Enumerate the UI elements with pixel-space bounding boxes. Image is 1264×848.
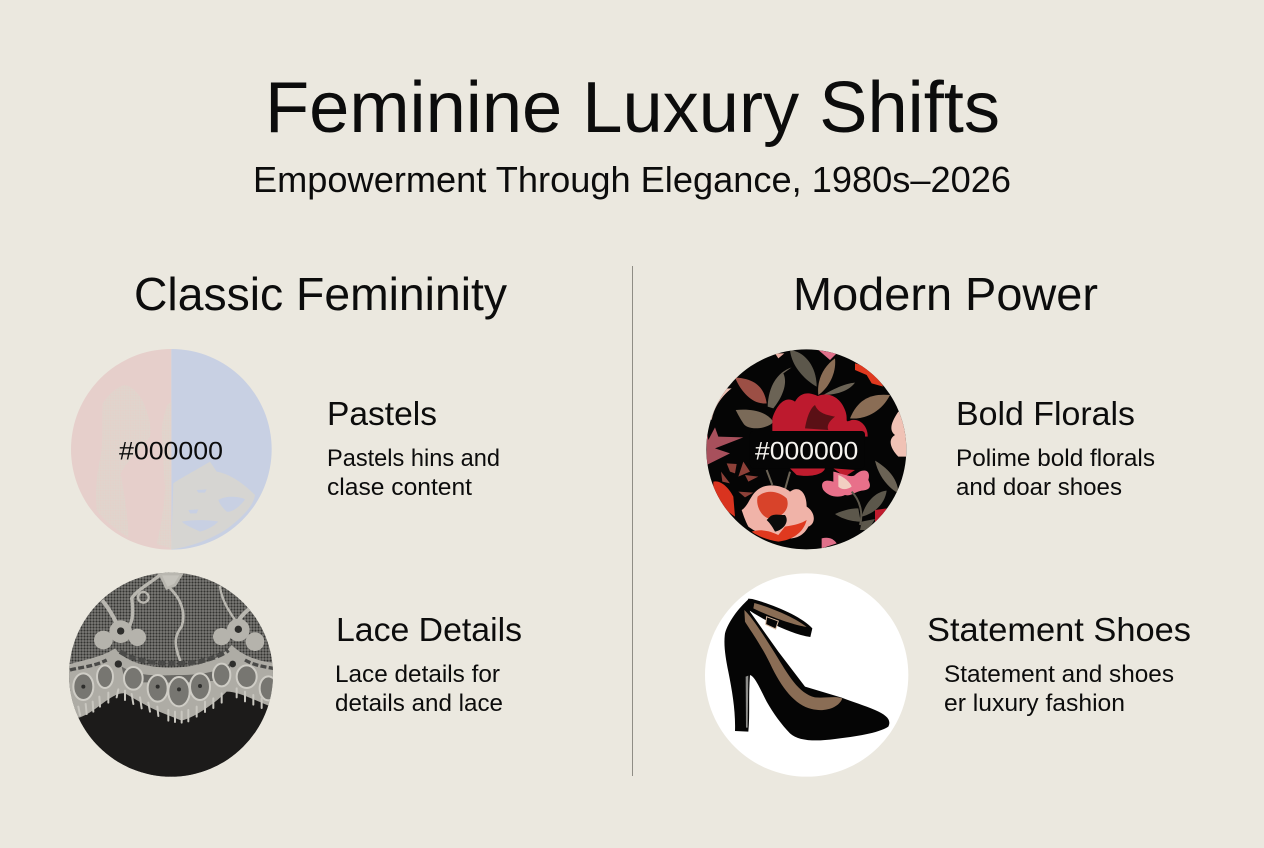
item heading: pastels: Pastels [327,395,437,432]
item heading: bold florals: Bold Florals [956,395,1135,432]
divider between columns [632,266,633,776]
text block: lace details [335,611,522,717]
item heading: lace details: Lace Details [336,611,522,648]
leaves [790,350,817,387]
text block: statement shoes [927,611,1191,717]
large flower [742,485,814,539]
subtitle: Empowerment Through Elegance, 1980s–2026 [253,159,1011,200]
icon: lace circle [69,572,273,777]
lace band [63,645,280,723]
icon: floral circle [702,347,912,557]
shoe body [724,599,889,740]
item description: lace details: details and lace [335,690,503,717]
text block: pastels [327,395,500,501]
icon: shoe circle [705,573,908,777]
black fabric [78,692,268,777]
item heading: statement shoes: Statement Shoes [927,611,1191,648]
item description: bold florals: Polime bold florals [956,445,1155,472]
heading: modern power: Modern Power [793,268,1098,320]
fringe [78,688,262,723]
item description: pastels: Pastels hins and [327,445,500,472]
heading: classic femininity: Classic Femininity [134,268,507,320]
item description: statement shoes: Statement and shoes [944,661,1174,688]
title: Feminine Luxury Shifts [265,68,1000,148]
lace sprigs [103,573,250,660]
heel edge [746,676,748,728]
swatch label: #000000 [119,437,223,465]
swatch label: #000000 [755,437,858,465]
item description: statement shoes: er luxury fashion [944,690,1125,717]
item description: statement shoes [944,661,1174,717]
item description: bold florals: and doar shoes [956,474,1122,501]
icon: pastel swatch circle [67,347,276,553]
shoe strap [745,599,812,637]
item description: pastels: clase content [327,474,472,501]
label band [772,431,865,468]
panel: classic femininity [63,268,522,783]
item description: pastels [327,445,500,501]
item description: lace details: Lace details for [335,661,500,688]
scallops [73,664,277,706]
motifs [94,619,264,651]
shoe insole [744,610,842,710]
panel: modern power [702,268,1191,777]
item description: lace details [335,661,503,717]
pink flower [822,470,870,497]
text block: bold florals [956,395,1155,501]
red flower [772,393,868,437]
item description: bold florals [956,445,1155,501]
